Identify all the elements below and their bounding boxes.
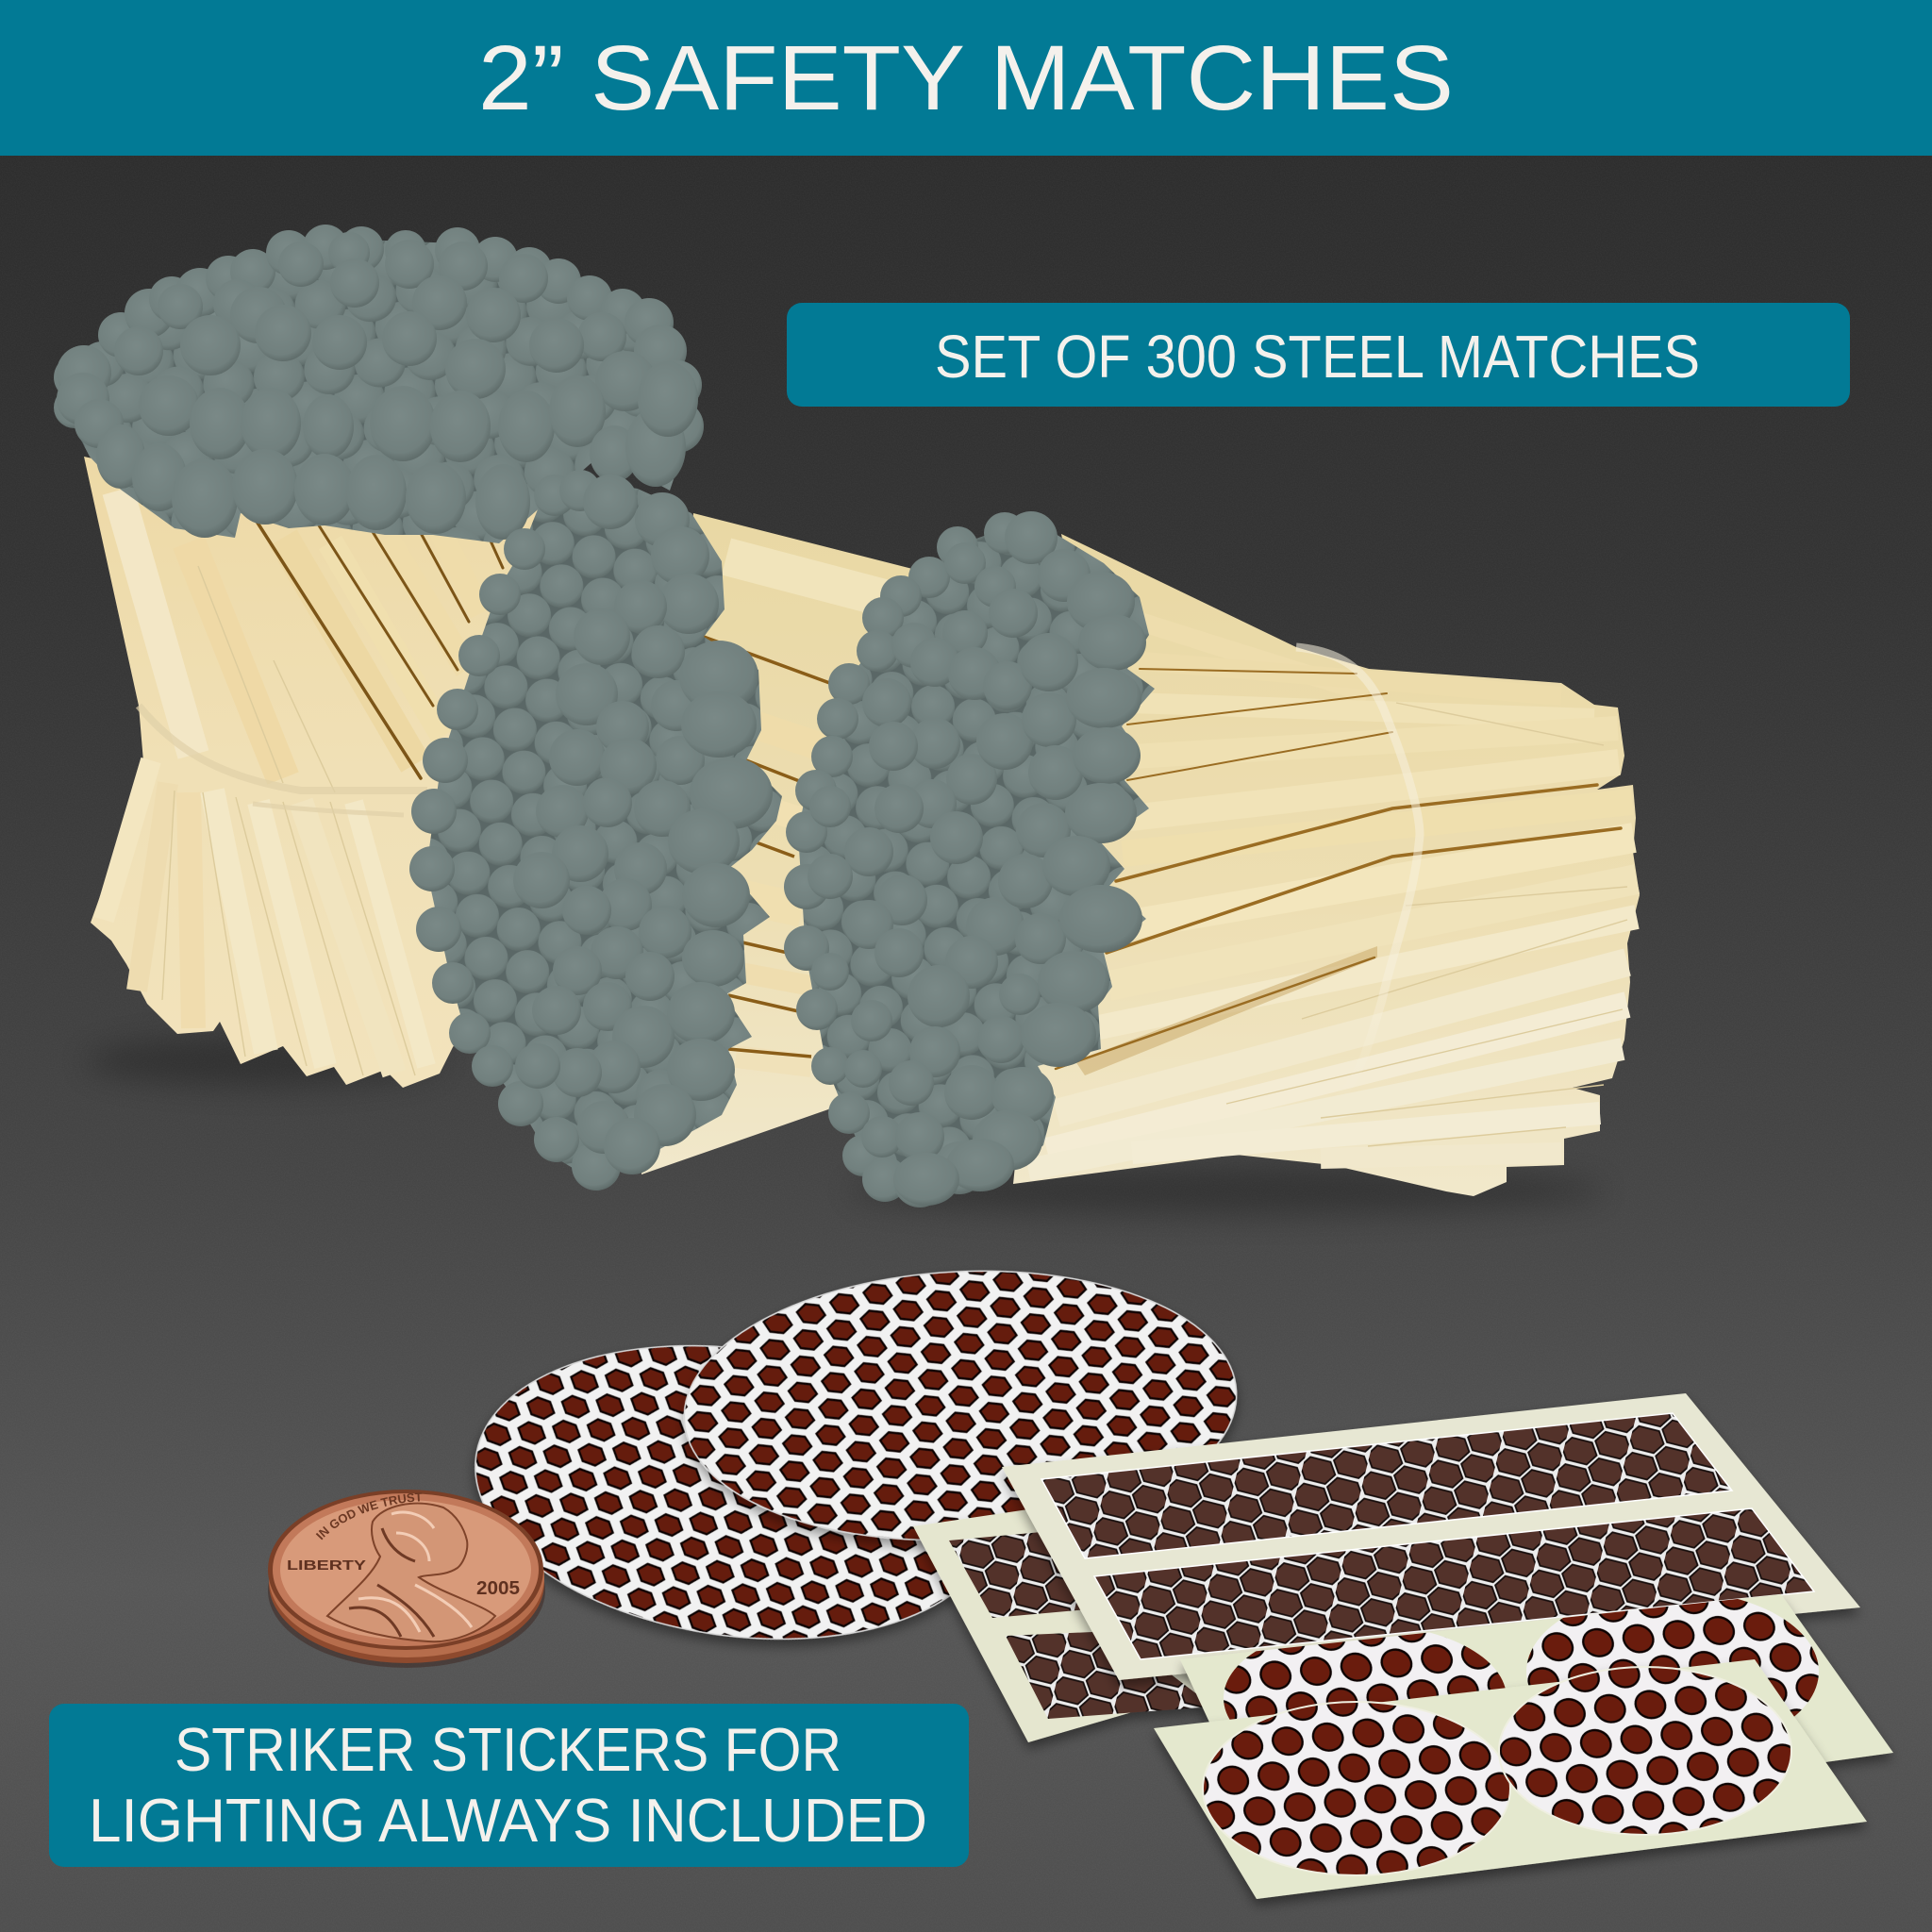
callout line 2: LIGHTING ALWAYS INCLUDED xyxy=(89,1786,927,1855)
sticks of front bundle xyxy=(1013,534,1640,1196)
striker card: back left with strips xyxy=(913,1509,1245,1742)
penny year: 2005 xyxy=(476,1578,520,1599)
strip xyxy=(1006,1631,1213,1719)
round sticker xyxy=(1224,1632,1506,1720)
penny motto: IN GOD WE TRUST xyxy=(315,1492,423,1540)
penny liberty text: LIBERTY xyxy=(287,1557,366,1574)
striker card: round stickers, front xyxy=(1154,1659,1867,1899)
heads of middle bundle xyxy=(409,470,782,1191)
callout: set of 300 steel matches xyxy=(787,303,1850,407)
match bundle: middle, heads left xyxy=(409,470,920,1191)
match bundle: front, heads left xyxy=(784,511,1640,1208)
callout: striker stickers xyxy=(49,1704,969,1867)
rubber band on upright bundle xyxy=(139,706,427,815)
penny coin xyxy=(268,1490,545,1668)
strip xyxy=(949,1532,1088,1618)
long strip bottom xyxy=(1094,1508,1814,1659)
soft shadow under match bundles xyxy=(85,1037,1604,1215)
striker disc: front xyxy=(677,1257,1243,1554)
heads of upright bundle xyxy=(54,225,704,543)
elastic band on front bundle xyxy=(1296,647,1420,1104)
sticks of upright bundle xyxy=(84,457,566,1088)
title: 2” SAFETY MATCHES xyxy=(478,26,1454,129)
striker card: round stickers, back xyxy=(1175,1594,1893,1772)
striker card: two long strips xyxy=(1002,1393,1860,1680)
callout line 1: STRIKER STICKERS FOR xyxy=(175,1715,841,1784)
sticks of middle bundle xyxy=(641,513,920,1174)
Lincoln bust xyxy=(327,1504,495,1641)
round sticker right xyxy=(1499,1667,1791,1835)
striker disc: back xyxy=(457,1314,1015,1671)
round sticker left xyxy=(1203,1702,1510,1875)
round sticker xyxy=(1526,1599,1819,1717)
heads of front bundle xyxy=(784,511,1155,1208)
match bundle: upright, heads up xyxy=(54,225,704,1088)
long strip top xyxy=(1041,1413,1732,1558)
header banner xyxy=(0,0,1932,156)
callout text: SET OF 300 STEEL MATCHES xyxy=(935,323,1700,391)
